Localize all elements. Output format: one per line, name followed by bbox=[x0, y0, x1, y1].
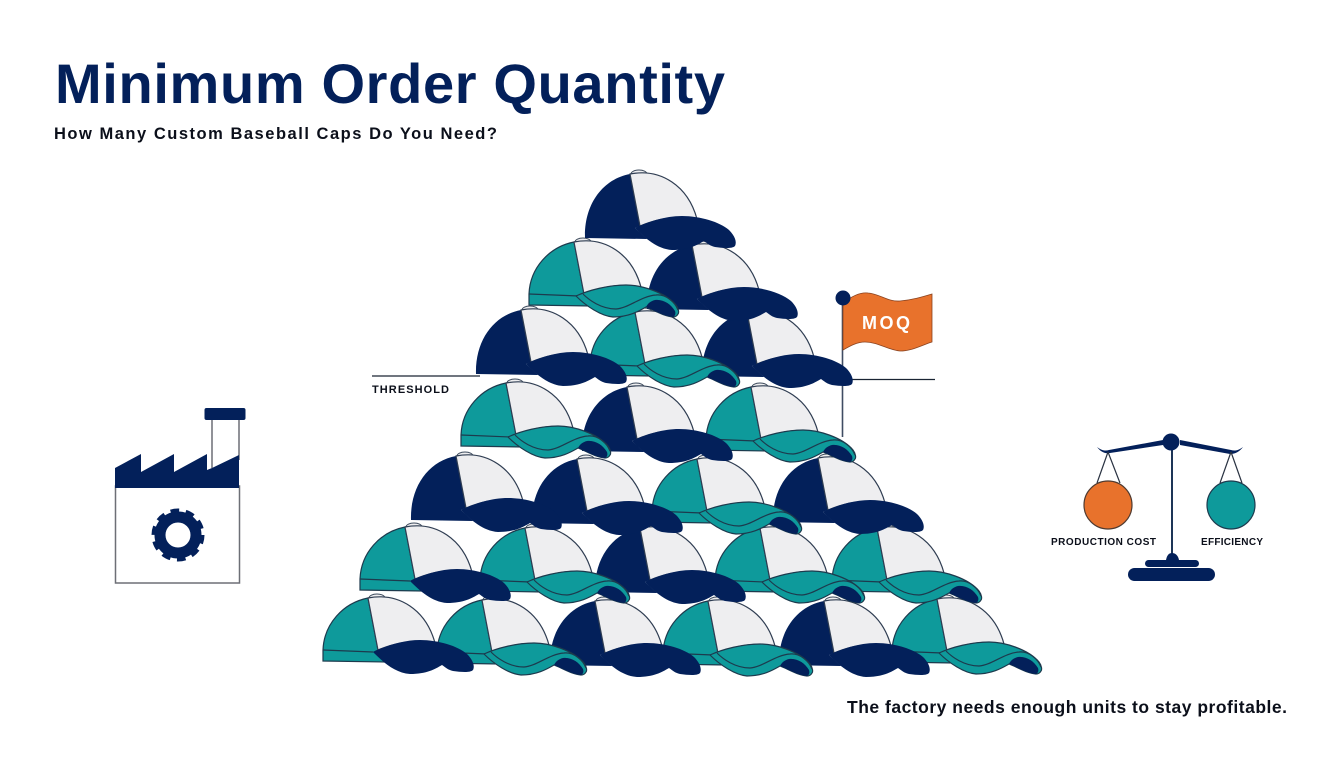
row 7 caps bbox=[323, 594, 1042, 677]
subtitle: How Many Custom Baseball Caps Do You Need? bbox=[54, 125, 497, 143]
label: production cost: PRODUCTION COST bbox=[1051, 537, 1156, 548]
icon: balance scale bbox=[1084, 434, 1255, 581]
footer caption: The factory needs enough units to stay profitable. bbox=[847, 697, 1287, 717]
row 1 cap bbox=[585, 170, 736, 250]
flag: MOQ marker bbox=[836, 290, 932, 437]
row 3 caps bbox=[476, 306, 853, 388]
icon: factory bbox=[115, 408, 246, 583]
icon: gear bbox=[154, 511, 202, 559]
row 4 caps bbox=[461, 379, 856, 463]
flag: MOQ marker: MOQ bbox=[862, 313, 910, 333]
row 5 caps bbox=[411, 452, 924, 535]
threshold line left bbox=[372, 375, 480, 377]
row 6 caps bbox=[360, 523, 982, 604]
label: efficiency: EFFICIENCY bbox=[1201, 537, 1263, 548]
row 2 caps bbox=[529, 238, 798, 321]
cap pyramid bbox=[323, 170, 1042, 677]
title: Minimum Order Quantity bbox=[55, 52, 725, 115]
threshold line right bbox=[843, 378, 935, 380]
threshold label: THRESHOLD bbox=[372, 384, 449, 396]
